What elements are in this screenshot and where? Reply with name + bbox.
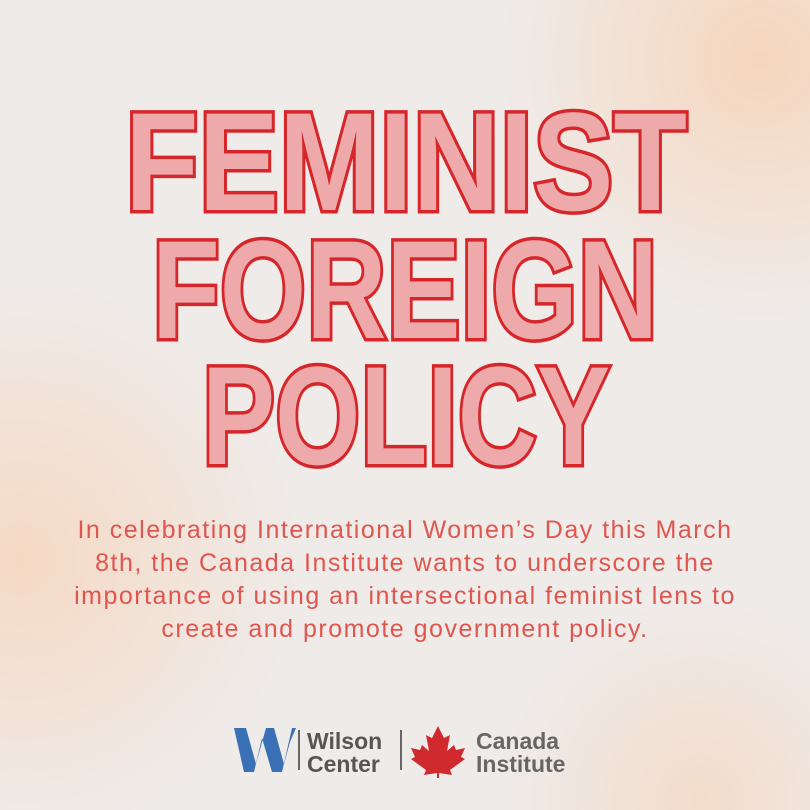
body text: create and promote government policy. — [161, 615, 649, 643]
body text — [74, 516, 736, 643]
body text: importance of using an intersectional feminist lens to — [74, 582, 736, 610]
icon: maple leaf — [411, 726, 465, 783]
logo: Institute — [476, 751, 565, 777]
title: FOREIGN — [152, 211, 658, 368]
icon: W — [234, 728, 296, 772]
body text: 8th, the Canada Institute wants to underscore the — [95, 549, 715, 577]
body text: In celebrating International Women’s Day this March — [77, 516, 733, 544]
logo: Center — [307, 751, 380, 777]
logo — [234, 726, 565, 778]
title: FEMINIST — [125, 83, 687, 240]
logo: Canada — [476, 728, 559, 754]
logo: Wilson — [307, 728, 382, 754]
title — [125, 83, 689, 480]
